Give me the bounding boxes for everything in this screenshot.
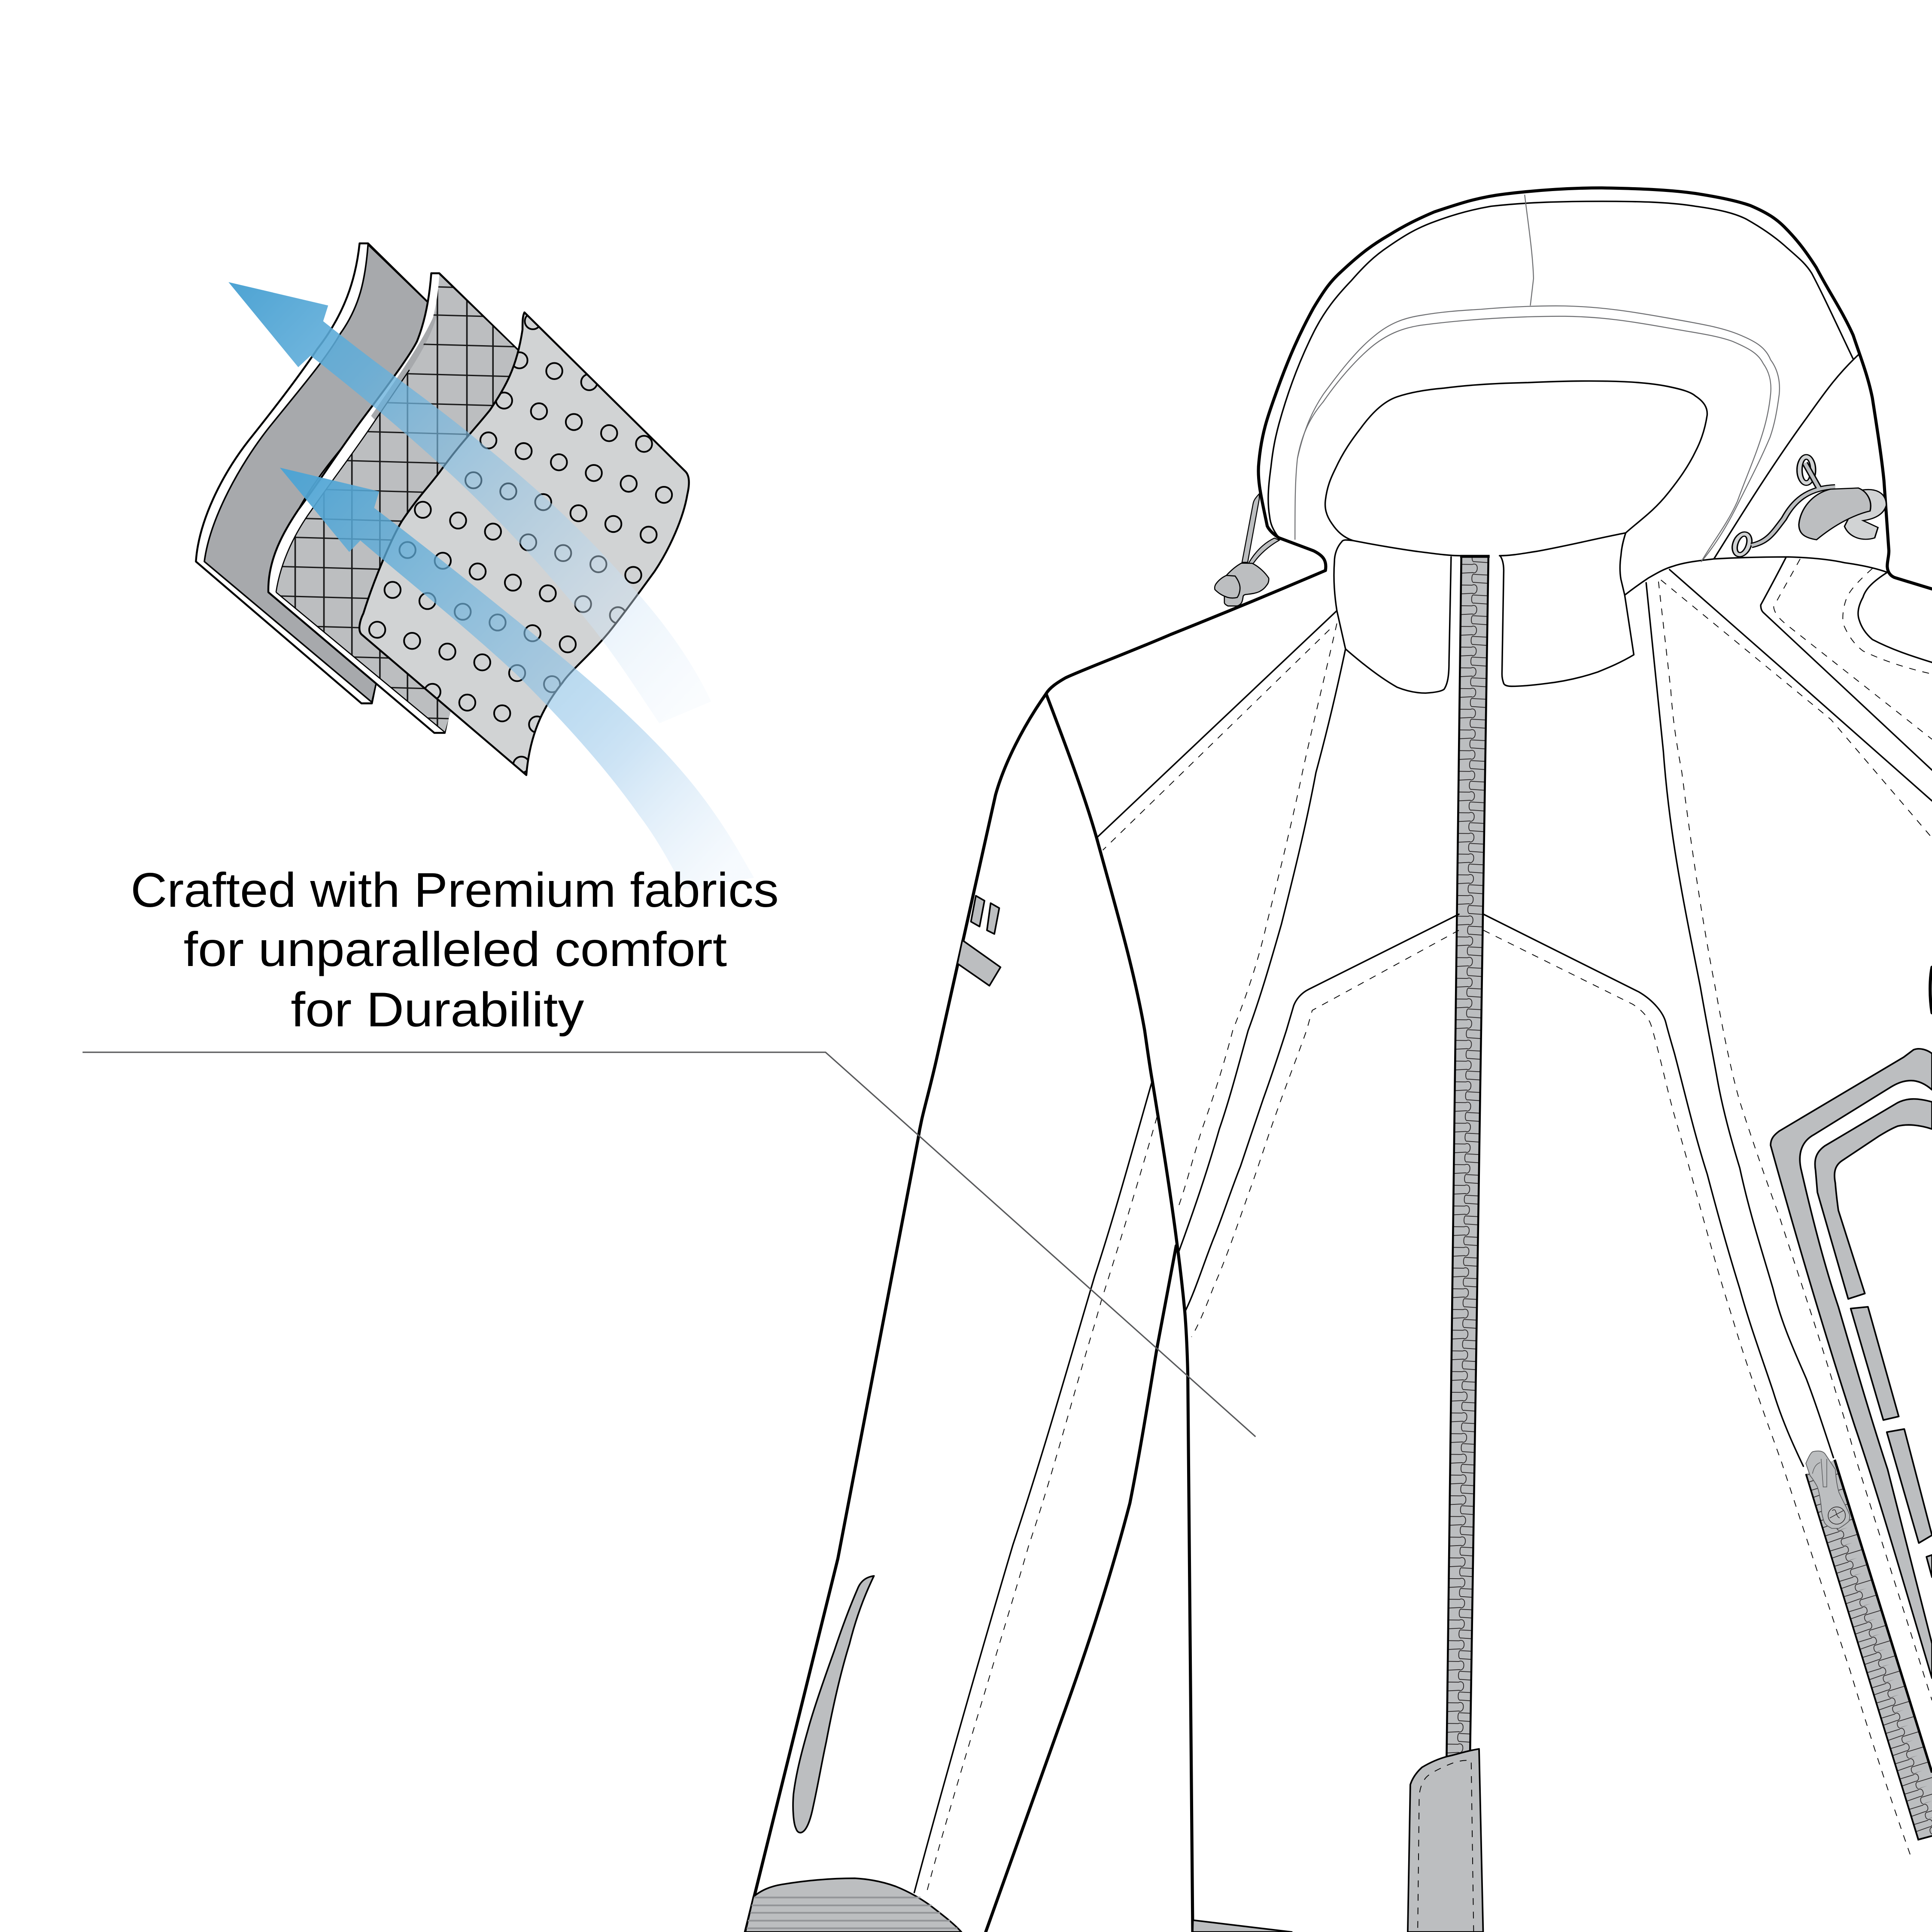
hood back thin seam xyxy=(1701,501,1738,562)
side pocket zipper xyxy=(1806,1460,1932,1840)
right front panel line xyxy=(1646,583,1833,1458)
arrow: upper airflow xyxy=(228,282,711,723)
centre zipper pad xyxy=(1408,1749,1483,1932)
shoulder panel line xyxy=(1097,611,1337,838)
hood inner rim xyxy=(1268,201,1853,538)
left sleeve outer xyxy=(745,571,1325,1932)
panel: breathable fabric layers with airflow arrows xyxy=(196,243,754,889)
sleeve vent xyxy=(793,1576,874,1833)
right shoulder stitching xyxy=(1843,568,1932,674)
right hood panel xyxy=(1714,354,1859,559)
hem panel xyxy=(1193,1920,1292,1932)
chest yoke left xyxy=(1185,914,1459,1312)
collar bottom edge xyxy=(1353,533,1626,556)
text block: callout heading: Crafted with Premium fabrics xyxy=(131,863,779,917)
right chest top edge xyxy=(1625,557,1887,595)
collar right flap xyxy=(1500,533,1634,687)
sleeve inner lower edge xyxy=(986,1245,1176,1932)
chest pocket segment two xyxy=(1887,1429,1932,1543)
chest pocket segment one xyxy=(1851,1307,1899,1420)
hood stitched piping outer xyxy=(1295,306,1780,562)
sleeve cuff xyxy=(745,1878,961,1932)
arm reflective marks xyxy=(957,896,1000,986)
side pocket zipper slider xyxy=(1806,1451,1850,1528)
fabric layer 3: perforated xyxy=(359,313,689,775)
front neck line xyxy=(1179,649,1346,1251)
chest pocket outer frame xyxy=(1771,1049,1932,1678)
front neck stitching xyxy=(1177,623,1337,1211)
right front panel stitching xyxy=(1659,582,1932,1700)
right pocket flap stitching xyxy=(1774,559,1932,739)
right diagonal stitching xyxy=(1661,580,1932,838)
fabric layer 2: grid mesh xyxy=(267,272,521,751)
hood stitched piping inner xyxy=(1297,316,1771,501)
chest yoke right xyxy=(1483,914,1803,1466)
text block: callout heading: for Durability xyxy=(291,983,584,1037)
sleeve armhole line xyxy=(1046,694,1193,1932)
collar left flap xyxy=(1334,540,1451,693)
arrow: lower airflow xyxy=(280,468,754,889)
shoulder panel stitching xyxy=(1103,630,1330,850)
fabric layer 1: solid grey xyxy=(196,243,436,703)
hood panel seam xyxy=(1525,194,1534,306)
jacket line drawing xyxy=(745,188,1932,1932)
text block: callout heading: for unparalleled comfort xyxy=(184,922,727,977)
hood outer outline with shoulder xyxy=(1258,188,1932,589)
sleeve seam stitching xyxy=(927,1117,1157,1893)
hood opening xyxy=(1325,381,1707,541)
text block: callout heading xyxy=(131,863,779,1037)
sleeve seam xyxy=(914,1081,1152,1893)
callout leader line xyxy=(82,1052,1255,1437)
chest pocket segment three xyxy=(1926,1555,1932,1577)
chest yoke left stitching xyxy=(1191,930,1459,1337)
chest edge detail xyxy=(1930,967,1932,1013)
main centre zipper xyxy=(1446,556,1490,1762)
chest pocket inner frame xyxy=(1815,1099,1932,1299)
chest yoke right stitching xyxy=(1483,930,1912,1861)
left cord toggle xyxy=(1215,494,1279,606)
right pocket flap xyxy=(1761,557,1932,770)
right shoulder curve xyxy=(1858,572,1932,662)
right cord toggle xyxy=(1729,455,1886,559)
right diagonal panel xyxy=(1670,570,1932,801)
